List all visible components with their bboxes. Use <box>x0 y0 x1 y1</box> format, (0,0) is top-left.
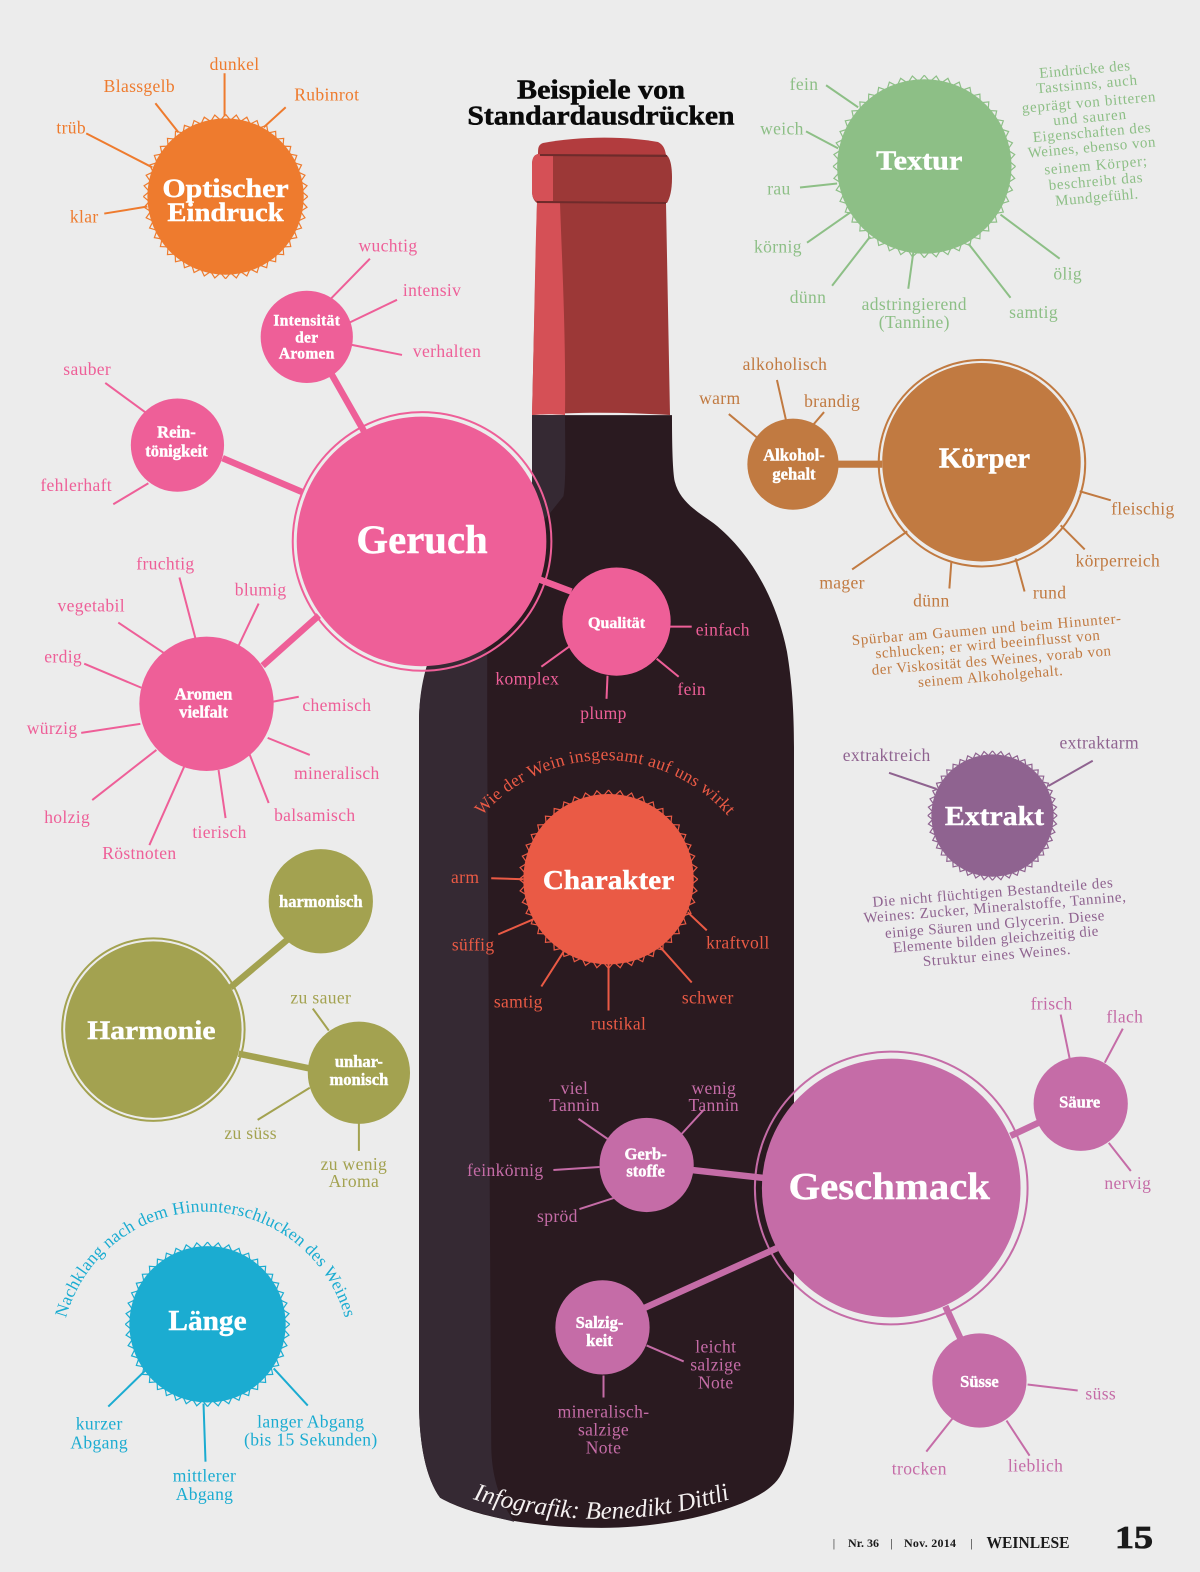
Geschmack main circle <box>755 1052 1028 1324</box>
Körper description: der Viskosität des Weines, vorab von <box>871 643 1112 679</box>
Körper main circle: Körper <box>939 444 1030 475</box>
Gerbstoffe: viel <box>561 1078 588 1098</box>
title: Standardausdrücken <box>467 100 735 130</box>
bottle body <box>419 415 794 1528</box>
Salzigkeit: mineralisch- <box>558 1402 649 1422</box>
Gerbstoffe: wenig <box>691 1078 736 1098</box>
title: Beispiele von <box>517 74 685 104</box>
panel: Textur: körnig <box>754 237 802 257</box>
Aromenvielfalt: Röstnoten <box>102 843 176 863</box>
Aromenvielfalt: blumig <box>235 580 287 600</box>
Aromenvielfalt <box>27 553 380 863</box>
Alkoholgehalt: Alkohol- <box>763 446 825 465</box>
Säure: Säure <box>1059 1092 1100 1111</box>
Intensität der Aromen: Intensität <box>273 312 341 329</box>
Textur description: seinem Körper; <box>1044 154 1148 179</box>
panel: Länge <box>55 1201 378 1504</box>
Intensität der Aromen: Aromen <box>279 345 335 362</box>
Körper main circle: fleischig <box>1111 498 1175 518</box>
Alkoholgehalt: brandig <box>804 391 860 411</box>
Säure: frisch <box>1031 994 1073 1014</box>
panel: Optischer Eindruck: dunkel <box>210 54 260 74</box>
panel: Optischer Eindruck <box>56 54 359 279</box>
Alkoholgehalt: alkoholisch <box>743 354 827 374</box>
panel: Textur: fein <box>790 74 818 94</box>
Extrakt description: Struktur eines Weines. <box>922 942 1071 970</box>
Aromenvielfalt: würzig <box>27 718 78 738</box>
Qualität: plump <box>580 703 627 723</box>
panel: Textur: ölig <box>1053 264 1082 284</box>
Textur description: geprägt von bitteren <box>1021 89 1157 117</box>
Körper description: Spürbar am Gaumen und beim Hinunter- <box>851 611 1122 649</box>
Intensität der Aromen: wuchtig <box>359 236 417 256</box>
unharmonisch: unhar- <box>335 1052 383 1071</box>
Aromenvielfalt: fruchtig <box>136 553 195 573</box>
panel: Textur: Textur <box>876 145 962 175</box>
panel: Textur: (Tannine) <box>879 312 950 332</box>
footer: 15 <box>1115 1519 1153 1555</box>
panel: Charakter: kraftvoll <box>706 932 770 952</box>
Gerbstoffe: Tannin <box>689 1095 739 1115</box>
panel: Charakter: arm <box>451 867 479 887</box>
Süsse: lieblich <box>1008 1456 1063 1476</box>
Extrakt description: Weines: Zucker, Mineralstoffe, Tannine, <box>863 889 1126 927</box>
Aromenvielfalt: mineralisch <box>294 763 380 783</box>
panel: Geruch <box>27 236 750 863</box>
unharmonisch: zu wenig <box>321 1154 387 1174</box>
panel: Körper <box>699 354 1175 691</box>
panel: Textur: rau <box>767 179 791 199</box>
harmonisch: harmonisch <box>279 892 363 911</box>
Geruch main circle: Geruch <box>356 517 488 562</box>
Süsse <box>892 1333 1116 1479</box>
Textur description <box>1021 58 1157 210</box>
Geruch main circle <box>293 412 551 671</box>
Alkoholgehalt <box>699 354 860 510</box>
panel: Textur: adstringierend <box>862 294 967 314</box>
cap band <box>532 154 672 203</box>
Salzigkeit: salzige <box>578 1420 629 1440</box>
panel: Optischer Eindruck: trüb <box>56 117 86 137</box>
unharmonisch: zu süss <box>224 1123 277 1143</box>
Textur description: beschreibt das <box>1048 170 1143 194</box>
Körper main circle: mager <box>819 572 865 592</box>
Körper main circle: dünn <box>913 591 950 611</box>
harmonisch <box>269 849 373 953</box>
Textur description: und sauren <box>1053 107 1127 129</box>
panel: Textur <box>754 58 1157 332</box>
panel: Länge: mittlerer <box>173 1466 236 1486</box>
panel: Charakter: schwer <box>682 988 734 1008</box>
Süsse: trocken <box>892 1459 947 1479</box>
cap lines <box>537 155 667 203</box>
unharmonisch <box>224 988 410 1191</box>
panel: Charakter: süffig <box>452 934 495 954</box>
panel: Textur: dünn <box>790 287 826 307</box>
Gerbstoffe: Tannin <box>549 1095 600 1115</box>
footer: | <box>890 1536 893 1550</box>
Körper description <box>851 611 1122 691</box>
unharmonisch: zu sauer <box>290 988 351 1008</box>
panel: Extrakt: Extrakt <box>945 801 1044 831</box>
footer <box>833 1519 1153 1555</box>
Aromenvielfalt: vielfalt <box>179 702 228 721</box>
unharmonisch: Aroma <box>329 1171 379 1191</box>
Extrakt description: einige Säuren und Glycerin. Diese <box>884 908 1105 942</box>
title <box>467 74 735 130</box>
Alkoholgehalt: gehalt <box>772 465 816 484</box>
Intensität der Aromen: intensiv <box>403 280 461 300</box>
Aromenvielfalt: balsamisch <box>274 805 355 825</box>
Aromenvielfalt: erdig <box>44 647 82 667</box>
Qualität: einfach <box>696 620 750 640</box>
panel: Optischer Eindruck: Optischer <box>162 174 289 203</box>
Textur description: Mundgefühl. <box>1055 186 1139 210</box>
panel: Harmonie <box>62 849 410 1191</box>
cap top <box>538 138 666 155</box>
Körper main circle: rund <box>1033 583 1066 603</box>
footer: WEINLESE <box>987 1533 1070 1552</box>
panel: Geschmack <box>467 994 1151 1479</box>
Textur description: Eigenschaften des <box>1032 120 1151 146</box>
Qualität <box>495 567 750 723</box>
panel: Länge: Abgang <box>176 1484 233 1504</box>
curved caption: Nachklang nach dem Hinunterschlucken des Weines <box>55 1201 352 1318</box>
Geschmack main circle: Geschmack <box>788 1166 991 1208</box>
Süsse: süss <box>1085 1384 1116 1404</box>
Salzigkeit <box>555 1280 741 1458</box>
panel: Charakter <box>451 751 770 1034</box>
Intensität der Aromen: der <box>295 329 318 346</box>
Salzigkeit: Salzig- <box>576 1313 623 1332</box>
footer: Nr. 36 <box>848 1536 879 1550</box>
panel: Textur: samtig <box>1009 302 1058 322</box>
Säure <box>1031 994 1151 1193</box>
Aromenvielfalt: Aromen <box>175 684 232 703</box>
Gerbstoffe: stoffe <box>626 1161 665 1180</box>
Reintönigkeit: fehlerhaft <box>40 475 112 495</box>
wine bottle <box>419 138 794 1528</box>
Textur description: Eindrücke des <box>1039 58 1131 82</box>
panel: Optischer Eindruck: klar <box>70 207 99 227</box>
Reintönigkeit: sauber <box>63 359 111 379</box>
Salzigkeit: Note <box>698 1372 734 1392</box>
unharmonisch: monisch <box>329 1070 388 1089</box>
Süsse: Süsse <box>960 1372 999 1391</box>
Harmonie main circle <box>62 938 245 1121</box>
Intensität der Aromen <box>261 236 481 383</box>
Salzigkeit: leicht <box>695 1336 736 1356</box>
panel: Optischer Eindruck: Blassgelb <box>104 76 175 96</box>
capsule <box>532 138 672 415</box>
Qualität: komplex <box>495 669 559 689</box>
Textur description: Weines, ebenso von <box>1027 134 1157 162</box>
capsule highlight <box>532 203 565 415</box>
Reintönigkeit <box>40 359 224 504</box>
Aromenvielfalt: tierisch <box>192 822 247 842</box>
Aromenvielfalt: holzig <box>44 807 90 827</box>
panel: Länge: Länge <box>168 1306 247 1337</box>
Gerbstoffe: Gerb- <box>624 1144 667 1163</box>
bottle neck highlight <box>501 415 565 561</box>
Gerbstoffe <box>467 1078 739 1226</box>
Salzigkeit: Note <box>586 1438 621 1458</box>
signature: Infografik: Benedikt Dittli <box>472 1484 729 1521</box>
Körper main circle: körperreich <box>1075 550 1160 570</box>
panel: Textur: weich <box>760 118 804 138</box>
panel: Länge: kurzer <box>76 1414 123 1434</box>
Gerbstoffe: spröd <box>537 1206 578 1226</box>
Alkoholgehalt: warm <box>699 388 740 408</box>
panel: Charakter: rustikal <box>591 1014 646 1034</box>
curved caption: Wie der Wein insgesamt auf uns wirkt <box>474 751 734 816</box>
panel: Extrakt: extraktarm <box>1060 732 1139 752</box>
panel: Optischer Eindruck: Eindruck <box>167 198 284 227</box>
Extrakt description: Elemente bilden gleichzeitig die <box>892 924 1099 956</box>
Aromenvielfalt: chemisch <box>302 695 371 715</box>
Körper main circle <box>819 360 1175 611</box>
Harmonie main circle: Harmonie <box>87 1016 216 1045</box>
Körper description: seinem Alkoholgehalt. <box>917 663 1063 691</box>
footer: | <box>833 1536 835 1550</box>
capsule neck <box>532 203 670 415</box>
Säure: nervig <box>1104 1173 1151 1193</box>
panel: Länge: langer Abgang <box>257 1412 364 1432</box>
Salzigkeit: keit <box>586 1331 613 1350</box>
Intensität der Aromen: verhalten <box>413 341 481 361</box>
Extrakt description <box>863 875 1126 970</box>
Reintönigkeit: Rein- <box>157 423 196 442</box>
Qualität: Qualität <box>588 615 646 632</box>
Extrakt description: Die nicht flüchtigen Bestandteile des <box>872 875 1114 911</box>
cap band highlight <box>532 154 553 201</box>
Qualität: fein <box>677 679 706 699</box>
Aromenvielfalt: vegetabil <box>58 596 125 616</box>
Salzigkeit: salzige <box>690 1354 741 1374</box>
panel: Länge: Abgang <box>70 1433 128 1453</box>
Textur description: Tastsinns, auch <box>1036 73 1138 97</box>
panel: Charakter: Charakter <box>543 865 674 895</box>
panel: Länge: (bis 15 Sekunden) <box>244 1430 378 1450</box>
panel: Extrakt <box>843 732 1139 970</box>
footer: | <box>970 1536 973 1550</box>
Körper description: schlucken; er wird beeinflusst von <box>875 628 1101 662</box>
Gerbstoffe: feinkörnig <box>467 1160 544 1180</box>
panel: Optischer Eindruck: Rubinrot <box>294 84 359 104</box>
Säure: flach <box>1106 1007 1143 1027</box>
Reintönigkeit: tönigkeit <box>145 442 208 461</box>
bottle body highlight <box>419 622 514 1522</box>
footer: Nov. 2014 <box>904 1536 956 1550</box>
panel: Extrakt: extraktreich <box>843 745 931 765</box>
panel: Charakter: samtig <box>494 992 543 1012</box>
